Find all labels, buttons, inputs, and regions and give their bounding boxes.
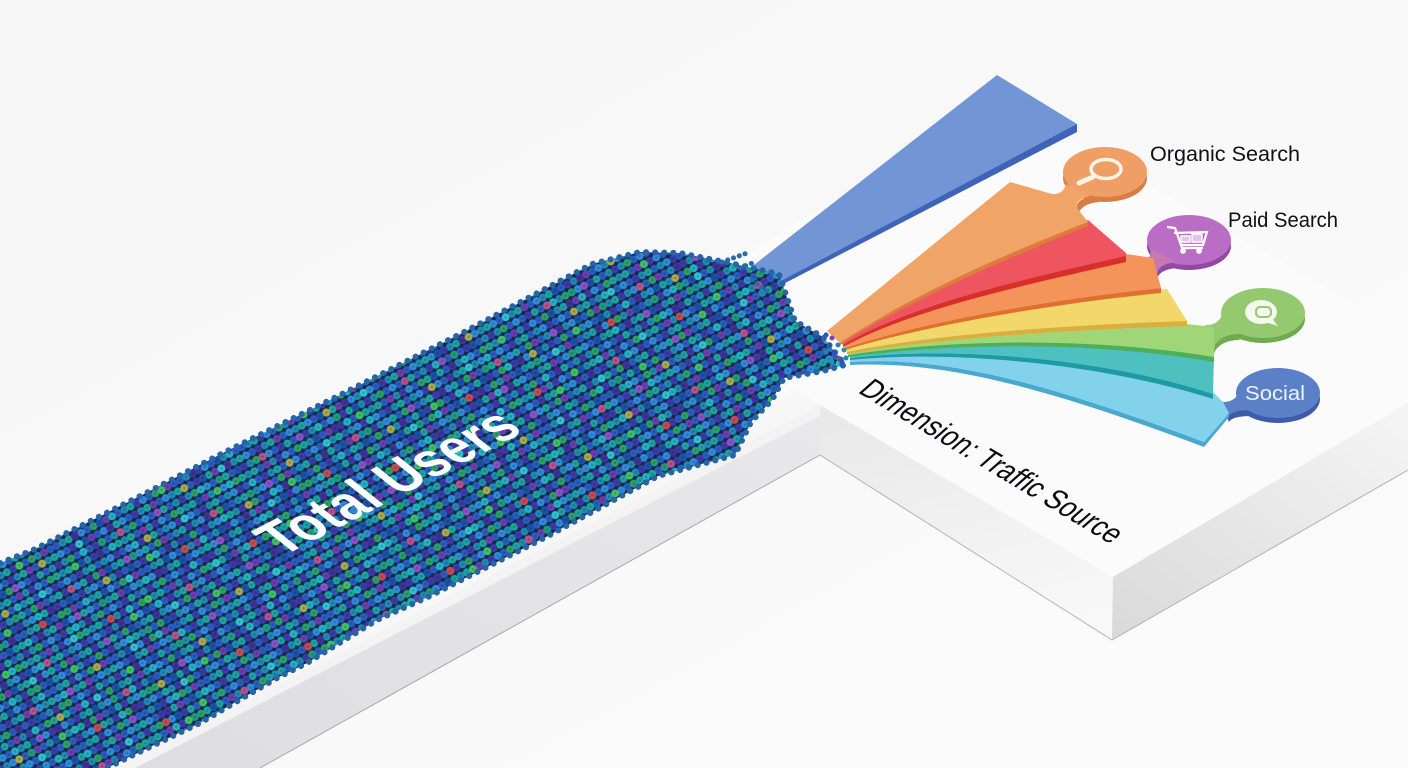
blue metric bar [750,75,1077,296]
panel: raised right slab [720,100,1408,640]
bead cluster at fan apex [826,335,846,362]
icon: chat [1245,300,1278,326]
bubble: Social: Social [1245,383,1305,405]
fan of traffic source bands [827,147,1320,447]
label: Paid Search: Paid Search [1228,209,1338,232]
band: yellow [845,289,1187,354]
band: green [847,320,1214,362]
bead stream: total users [0,252,845,768]
bubble: orange search [1063,147,1147,212]
label: Dimension: Traffic Source: Dimension: Traffic Source [852,373,1132,549]
band: teal [848,340,1214,399]
bubble: Social [1223,368,1320,423]
icon: shopping cart [1167,227,1207,253]
band: red [840,220,1126,347]
band: light orange [827,182,1090,345]
band: light blue [850,351,1229,447]
bubble: purple cart [1146,215,1231,280]
bubble: green chat [1205,288,1305,354]
panel: lower left slab [60,380,820,768]
band: deep orange [843,254,1161,350]
label: Organic Search: Organic Search [1150,143,1300,166]
icon: magnifier [1079,160,1121,183]
label: Total Users: Total Users [241,399,535,565]
